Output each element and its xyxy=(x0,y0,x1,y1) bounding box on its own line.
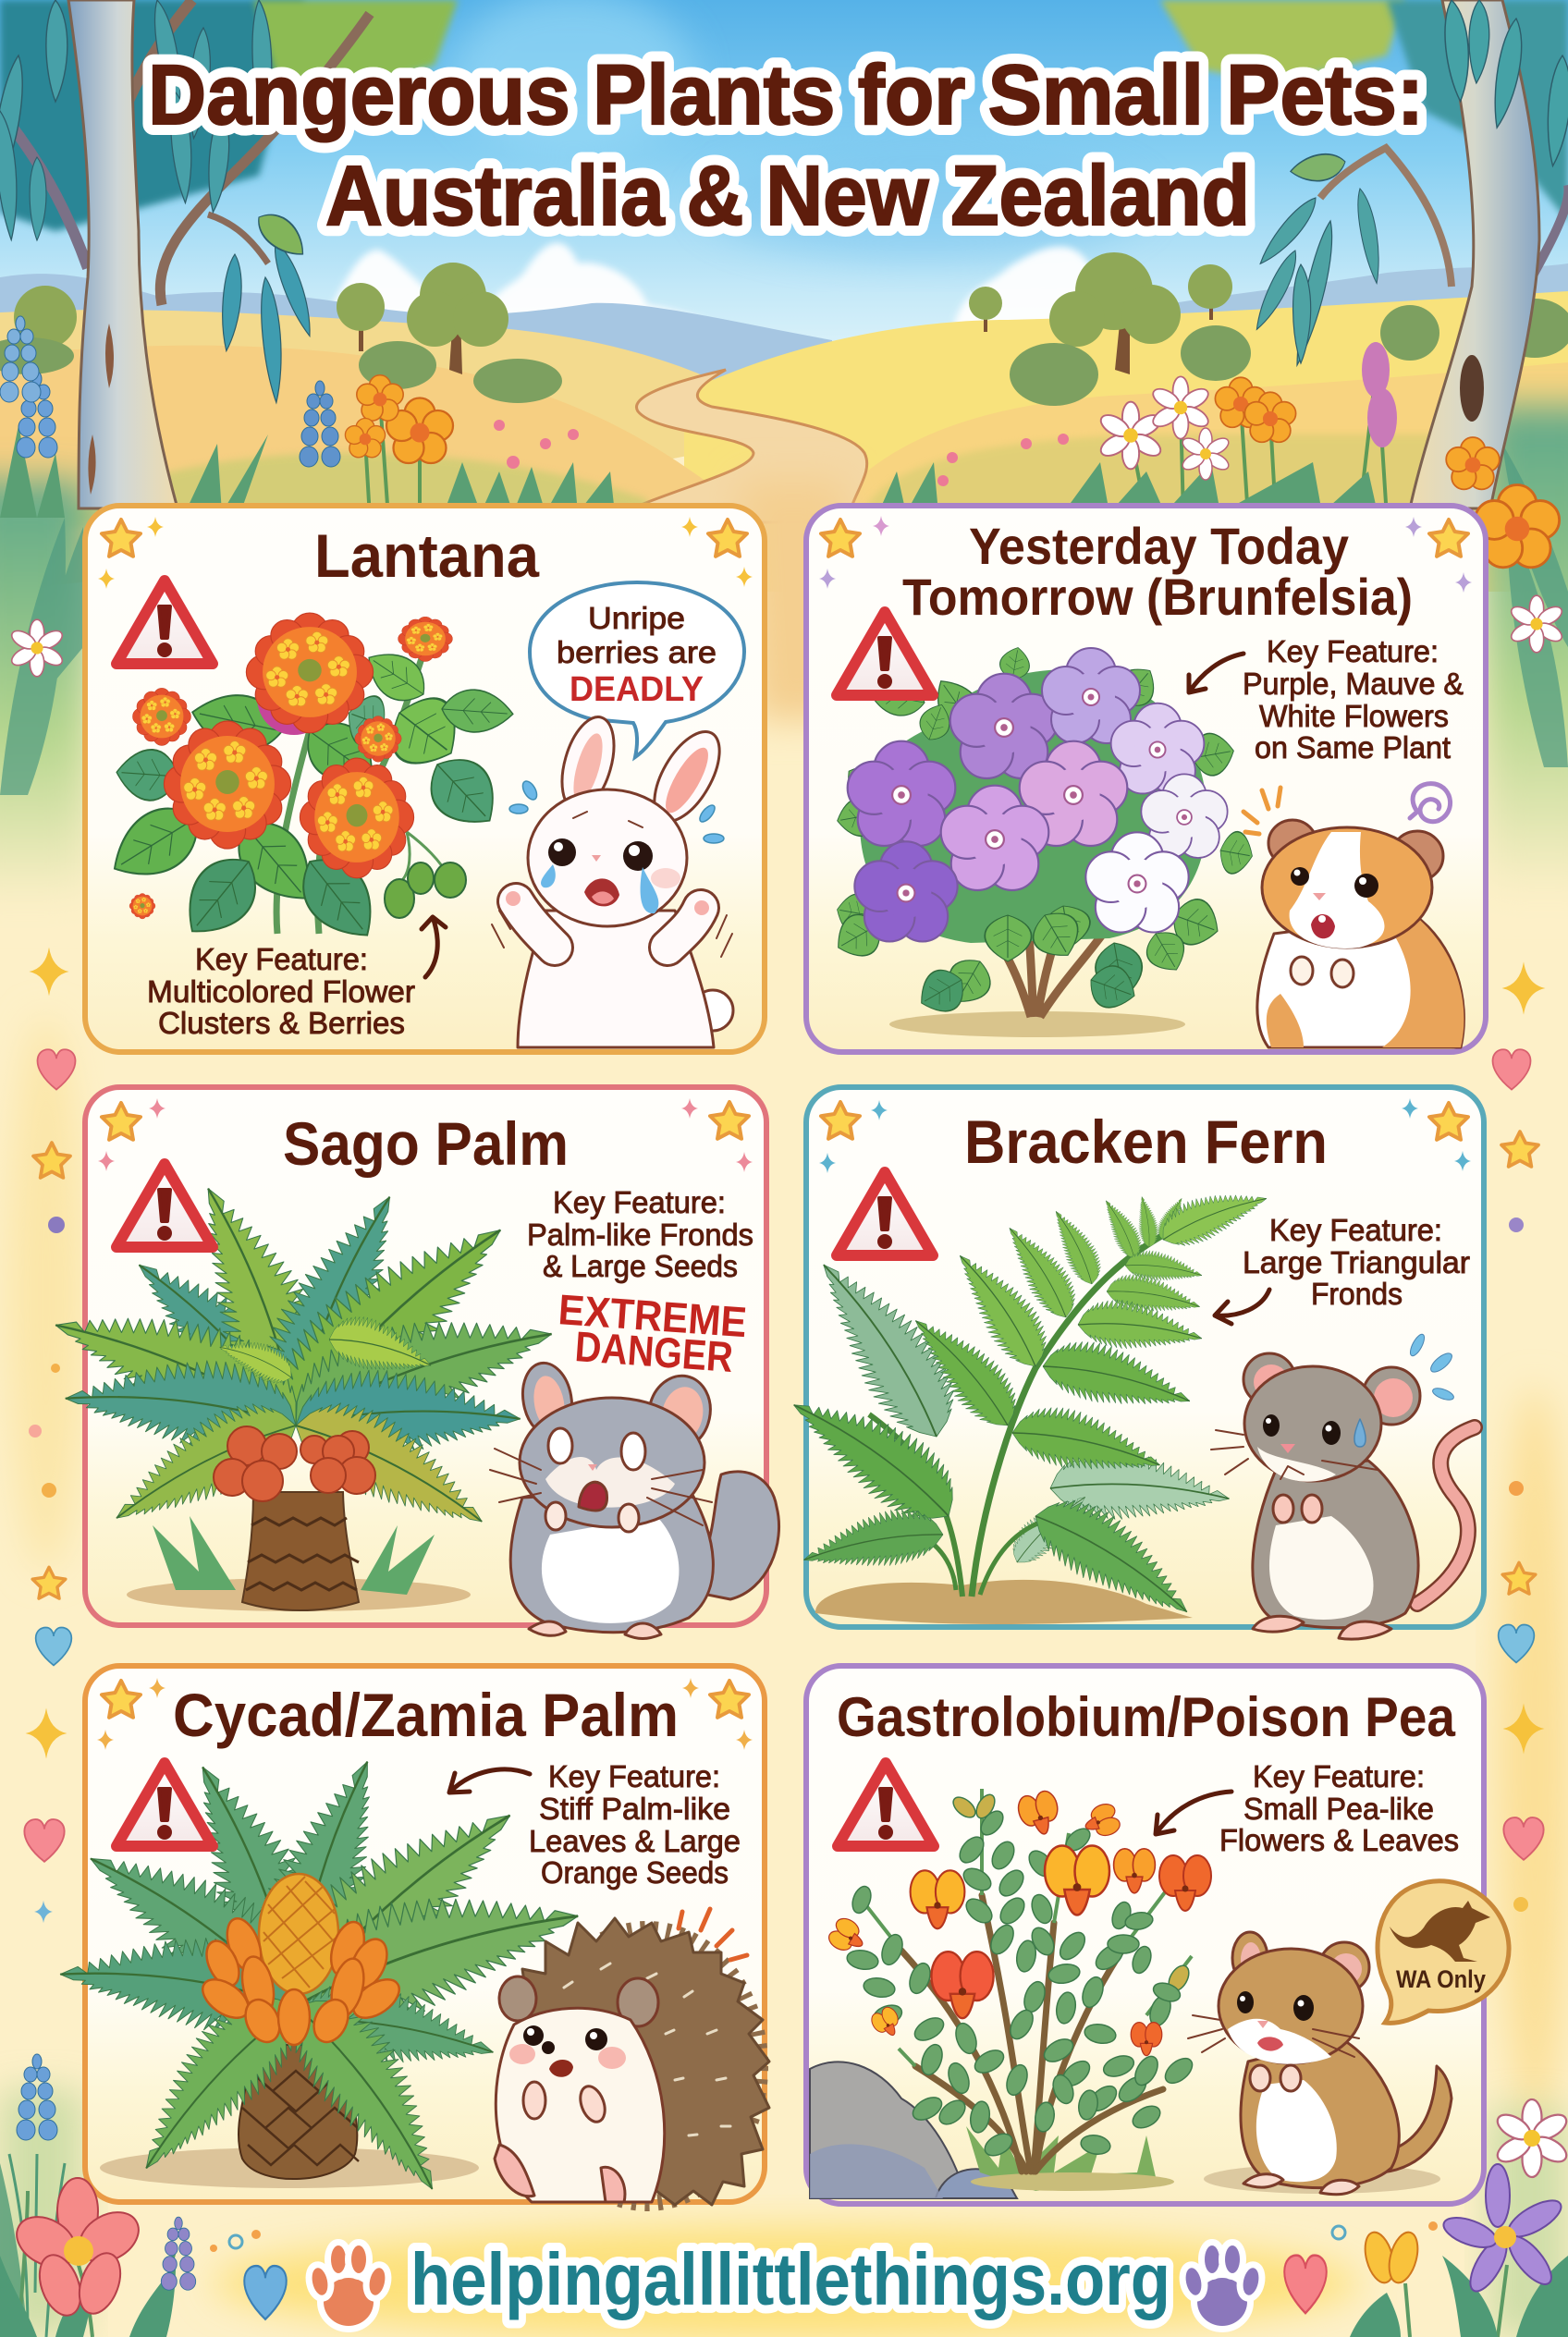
speech bubble: DEADLY xyxy=(570,670,704,709)
heading xyxy=(902,517,1413,626)
heading: Yesterday Today xyxy=(969,517,1349,575)
scene: distant trees and bushes xyxy=(0,252,1568,406)
icon: purple paw xyxy=(1183,2245,1261,2326)
plant: bracken fern xyxy=(790,1164,1268,1624)
badge: WA Only: WA Only xyxy=(1396,1965,1486,1993)
key feature note xyxy=(1243,634,1464,765)
decorative stars xyxy=(97,1678,753,1750)
plant: cycad xyxy=(57,1751,582,2195)
character: chinchilla xyxy=(490,1359,779,1638)
panel frame xyxy=(806,1087,1484,1627)
bottom corner flowers: left xyxy=(0,2178,261,2337)
scene: green side foliage xyxy=(0,407,1568,906)
icon: warning triangle xyxy=(838,1763,934,1846)
key feature note: Key Feature: xyxy=(195,942,368,976)
heading: Tomorrow (Brunfelsia) xyxy=(902,568,1413,626)
decorative stars xyxy=(819,516,1472,593)
key feature note xyxy=(1243,1213,1470,1311)
scene: right gum tree xyxy=(1160,0,1568,508)
title: Dangerous Plants for Small Pets: xyxy=(148,48,1424,142)
key feature note: Flowers & Leaves xyxy=(1219,1823,1459,1857)
key feature note: Fronds xyxy=(1311,1277,1403,1311)
heading: Gastrolobium/Poison Pea xyxy=(837,1686,1456,1748)
callout: extreme danger xyxy=(557,1285,748,1381)
footer url: helpingalllittlethings.org xyxy=(410,2238,1170,2320)
key feature note: & Large Seeds xyxy=(543,1249,738,1283)
panel: Bracken Fern xyxy=(790,1087,1484,1639)
plant: lantana xyxy=(99,613,514,953)
icon: red heart xyxy=(1284,2256,1327,2313)
key feature note: Orange Seeds xyxy=(541,1855,729,1890)
surprise marks xyxy=(679,1909,747,1960)
panel: Sago Palm xyxy=(51,1087,779,1638)
arrow xyxy=(422,917,446,977)
key feature note: Multicolored Flower xyxy=(147,974,415,1009)
key feature note: White Flowers xyxy=(1259,699,1449,733)
icon: warning triangle xyxy=(837,612,933,695)
key feature note: Key Feature: xyxy=(553,1185,726,1219)
key feature note xyxy=(1219,1759,1459,1857)
panel: Cycad/Zamia Palm xyxy=(57,1666,769,2205)
icon: warning triangle xyxy=(116,581,213,664)
key feature note: Palm-like Fronds xyxy=(527,1217,753,1252)
plant: poison pea xyxy=(826,1789,1211,2191)
side decoration: left margin xyxy=(0,619,75,2337)
heading: Lantana xyxy=(314,521,540,590)
key feature note: Large Triangular xyxy=(1243,1245,1470,1279)
panel: Lantana xyxy=(85,506,765,1052)
key feature note: Key Feature: xyxy=(1269,1213,1442,1247)
key feature note: Small Pea-like xyxy=(1243,1792,1434,1826)
plant: brunfelsia bush xyxy=(827,645,1256,1037)
scene: sky and hills xyxy=(0,0,1568,721)
panel frame xyxy=(85,1666,765,2202)
callout: extreme danger: EXTREME xyxy=(557,1285,748,1346)
icon: orange paw xyxy=(310,2245,387,2326)
icon: blue heart xyxy=(244,2266,287,2319)
arrow xyxy=(1156,1792,1231,1834)
callout: extreme danger: DANGER xyxy=(573,1322,735,1381)
icon: warning triangle xyxy=(116,1763,213,1846)
bottom corner flowers: right xyxy=(1332,2164,1568,2337)
surprise marks xyxy=(1243,788,1280,834)
key feature note: on Same Plant xyxy=(1255,730,1451,765)
key feature note xyxy=(529,1759,741,1890)
speech bubble xyxy=(530,582,744,757)
key feature note: Key Feature: xyxy=(548,1759,720,1793)
icon: dizzy swirl xyxy=(1410,784,1451,822)
heading: Bracken Fern xyxy=(964,1107,1328,1176)
character: dunnart xyxy=(1188,1932,1452,2195)
key feature note: Key Feature: xyxy=(1253,1759,1425,1793)
character: hedgehog xyxy=(495,1918,769,2205)
key feature note: Key Feature: xyxy=(1267,634,1439,668)
title: Dangerous Plants for Small Pets: xyxy=(148,48,1424,142)
arrow xyxy=(449,1769,530,1793)
panel: Gastrolobium/Poison Pea xyxy=(806,1666,1509,2204)
speech bubble: berries are xyxy=(557,635,717,669)
key feature note xyxy=(527,1185,753,1283)
panel frame xyxy=(85,506,765,1052)
rocks xyxy=(810,2062,1017,2198)
title xyxy=(148,48,1424,243)
arrow xyxy=(1215,1290,1269,1324)
heading: Sago Palm xyxy=(283,1109,569,1178)
character: crying rabbit xyxy=(492,711,733,1047)
decorative stars xyxy=(819,1098,1471,1173)
icon: warning triangle xyxy=(837,1172,933,1255)
character: worried mouse xyxy=(1211,1332,1475,1639)
panel frame xyxy=(806,1666,1484,2204)
title: Australia & New Zealand xyxy=(325,149,1250,243)
panel frame xyxy=(85,1087,766,1625)
panel: Yesterday Today Tomorrow xyxy=(806,506,1486,1052)
plant: sago palm xyxy=(51,1170,557,1611)
speech bubble: Unripe xyxy=(588,601,685,635)
key feature note: Leaves & Large xyxy=(529,1824,741,1858)
icon: warning triangle xyxy=(116,1164,213,1247)
badge: WA Only xyxy=(1378,1881,1509,2023)
title: Australia & New Zealand xyxy=(325,149,1250,243)
key feature note xyxy=(147,942,415,1040)
side decoration: right margin xyxy=(1446,437,1568,2177)
panel frame xyxy=(806,506,1486,1052)
decorative stars xyxy=(98,1098,753,1172)
key feature note: Purple, Mauve & xyxy=(1243,667,1464,701)
heading: Cycad/Zamia Palm xyxy=(173,1681,679,1749)
scene: left gum tree xyxy=(0,0,458,508)
key feature note: Clusters & Berries xyxy=(158,1006,405,1040)
character: guinea pig xyxy=(1257,820,1464,1047)
decorative stars xyxy=(98,517,753,589)
key feature note: Stiff Palm-like xyxy=(539,1792,730,1826)
scene: meadow wildflowers xyxy=(0,316,1397,518)
arrow xyxy=(1189,654,1243,692)
